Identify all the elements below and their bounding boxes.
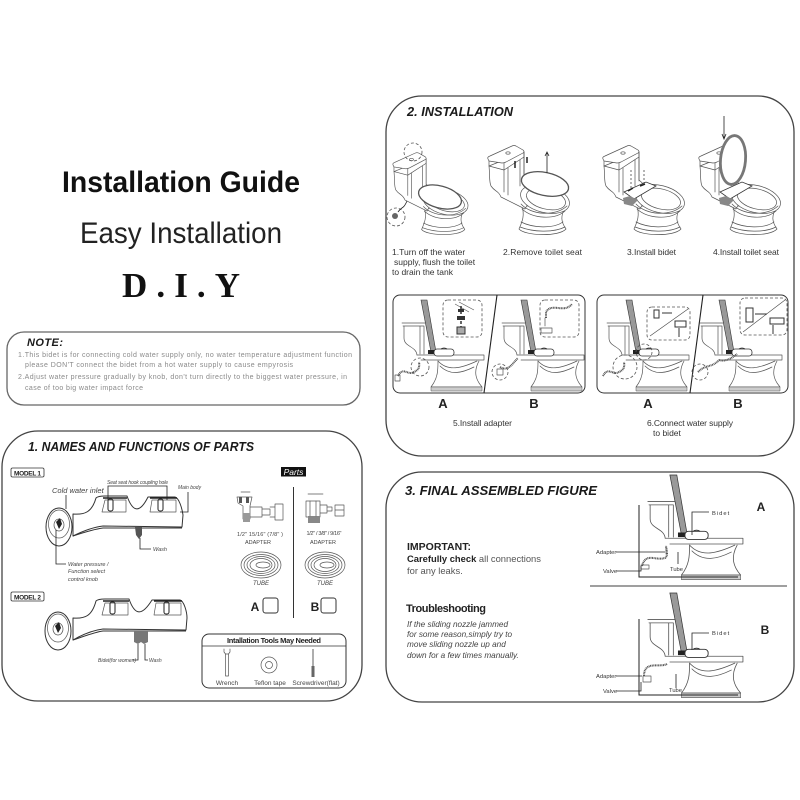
illustration: assembled A: [596, 475, 766, 580]
illustration: 5B: [492, 300, 584, 391]
note text: 2.Adjust water pressure gradually by knob, don't turn directly to the biggest water pressure, in: [18, 374, 347, 381]
kit A: adapter, tube and checkbox: A: [251, 600, 260, 614]
icon: wrench: Wrench: [216, 680, 239, 687]
caption: step 5: 5.Install adapter: [453, 418, 512, 428]
heading: final assembled figure: 3. FINAL ASSEMBLED FIGURE: [405, 483, 597, 498]
callout: important: [407, 541, 541, 576]
label: model 1: [11, 468, 44, 478]
kit B: adapter, tube and checkbox: 1/2" / 3/8" / 9/16": [306, 531, 342, 537]
callouts: model 1: [52, 480, 202, 583]
callout: important: Carefully check all connections: [407, 553, 541, 564]
illustration: assembled A: Tube: [670, 567, 683, 573]
frame: connect water supply illustrations: [597, 295, 788, 393]
frame: install adapter illustrations: [393, 295, 585, 393]
illustration: assembled B: Valve: [603, 689, 617, 695]
illustration: assembled B: Bidet: [712, 631, 730, 637]
step 1: turn off water: supply, flush the toilet: [394, 257, 476, 267]
step 4: install toilet seat: 4.Install toilet seat: [713, 247, 780, 257]
panel: note: [7, 332, 360, 405]
kit A: adapter, tube and checkbox: [237, 492, 283, 614]
labels: A and B under illustrations: A: [438, 396, 448, 411]
kit B: adapter, tube and checkbox: ADAPTER: [310, 540, 336, 546]
step 4: install toilet seat: [699, 116, 784, 257]
kit B: adapter, tube and checkbox: B: [311, 600, 320, 614]
illustration: 5A: [395, 300, 484, 391]
illustration: assembled A: A: [757, 500, 766, 514]
kit A: adapter, tube and checkbox: ADAPTER: [245, 540, 271, 546]
icon: flat screwdriver: [292, 649, 340, 687]
step 1: turn off water: to drain the tank: [392, 267, 454, 277]
note heading: NOTE:: [27, 337, 63, 349]
callout: troubleshooting: down for a few times manually.: [407, 651, 519, 660]
illustration: assembled B: [596, 593, 770, 698]
title: Installation Guide: Installation Guide: [62, 166, 300, 199]
callout: troubleshooting: [406, 603, 519, 660]
callout: important: for any leaks.: [407, 565, 463, 576]
labels: A and B under illustrations: B: [529, 396, 539, 411]
panel: names and functions of parts: [2, 431, 362, 701]
badge: parts: Parts: [284, 467, 304, 477]
heading: installation: 2. INSTALLATION: [406, 104, 514, 119]
note text: [18, 352, 352, 392]
subtitle: Easy Installation: Easy Installation: [80, 217, 282, 250]
callouts: model 1: Function select: [68, 569, 105, 575]
caption: step 6: 6.Connect water supply: [647, 418, 734, 428]
callout: important: IMPORTANT:: [407, 541, 471, 553]
illustration: model 1 bidet: [46, 496, 183, 546]
caption: step 6: to bidet: [653, 428, 682, 438]
step 3: install bidet: [603, 146, 688, 257]
icon: flat screwdriver: Screwdriver(flat): [292, 680, 340, 687]
callouts: model 2: Wash: [149, 658, 162, 664]
box: installation tools: Intallation Tools May Needed: [227, 636, 321, 645]
callouts: model 2: Bidet(for women): [98, 658, 136, 664]
callouts: model 1: control knob: [68, 577, 98, 583]
panel: final assembled figure: [386, 472, 794, 702]
callouts: model 1: Cold water inlet: [52, 486, 105, 495]
callouts: model 1: Wash: [153, 547, 167, 553]
label: model 2: MODEL 2: [14, 594, 41, 602]
step 1: turn off water: 1.Turn off the water: [392, 247, 465, 257]
labels: A and B under illustrations: B: [733, 396, 743, 411]
illustration: assembled B: Tube: [669, 688, 682, 694]
callout: troubleshooting: for some reason,simply try to: [407, 630, 513, 639]
illustration: assembled A: Bidet: [712, 511, 730, 517]
illustration: assembled A: Adapter: [596, 550, 616, 556]
panel: installation: [386, 96, 794, 456]
kit A: adapter, tube and checkbox: 1/2" 15/16" (7/8" ): [237, 532, 283, 538]
box: installation tools: [202, 634, 346, 688]
divider between parts kits: [292, 487, 294, 618]
caption: step 6: [647, 418, 734, 438]
illustration: assembled B: B: [761, 623, 770, 637]
callout: troubleshooting: If the sliding nozzle jammed: [407, 620, 508, 629]
icon: teflon tape: Teflon tape: [254, 680, 286, 687]
icon: wrench: [216, 649, 239, 687]
step 1: turn off water: [387, 143, 476, 277]
kit B: adapter, tube and checkbox: [305, 494, 345, 614]
callouts: model 2: [98, 644, 162, 664]
kit A: adapter, tube and checkbox: TUBE: [253, 581, 270, 587]
note text: 1.This bidet is for connecting cold water supply only, no water temperature adjustment function: [18, 352, 352, 359]
icon: teflon tape: [254, 657, 286, 687]
illustration: assembled B: Adapter: [596, 674, 616, 680]
illustration: model 2 bidet: [45, 599, 187, 650]
step 2: remove toilet seat: 2.Remove toilet seat: [503, 247, 583, 257]
subtitle: D.I.Y: D.I.Y: [122, 266, 240, 305]
labels: A and B under illustrations: [438, 396, 743, 411]
callout: troubleshooting: move sliding nozzle up and: [407, 640, 506, 649]
illustration: assembled A: Valve: [603, 569, 617, 575]
step 3: install bidet: 3.Install bidet: [627, 247, 677, 257]
step 2: remove toilet seat: [488, 146, 583, 257]
note text: please DON'T connect the bidet from a hot water supply to cause empyrosis: [25, 362, 294, 369]
callouts: model 1: Seat seat hook coupling hole: [107, 480, 168, 486]
labels: A and B under illustrations: A: [643, 396, 653, 411]
illustration: 6A: [603, 300, 690, 391]
label: model 2: [11, 592, 44, 602]
callouts: model 1: Water pressure /: [68, 562, 109, 568]
kit B: adapter, tube and checkbox: TUBE: [317, 581, 334, 587]
divider between assembled figures: [590, 585, 787, 587]
callouts: model 1: Main body: [178, 485, 202, 491]
note text: case of too big water impact force: [25, 385, 143, 392]
illustration: 6B: [692, 298, 787, 391]
callout: troubleshooting: Troubleshooting: [406, 603, 486, 615]
heading: names and functions: 1. NAMES AND FUNCTIONS OF PARTS: [28, 439, 254, 454]
label: model 1: MODEL 1: [14, 470, 41, 478]
